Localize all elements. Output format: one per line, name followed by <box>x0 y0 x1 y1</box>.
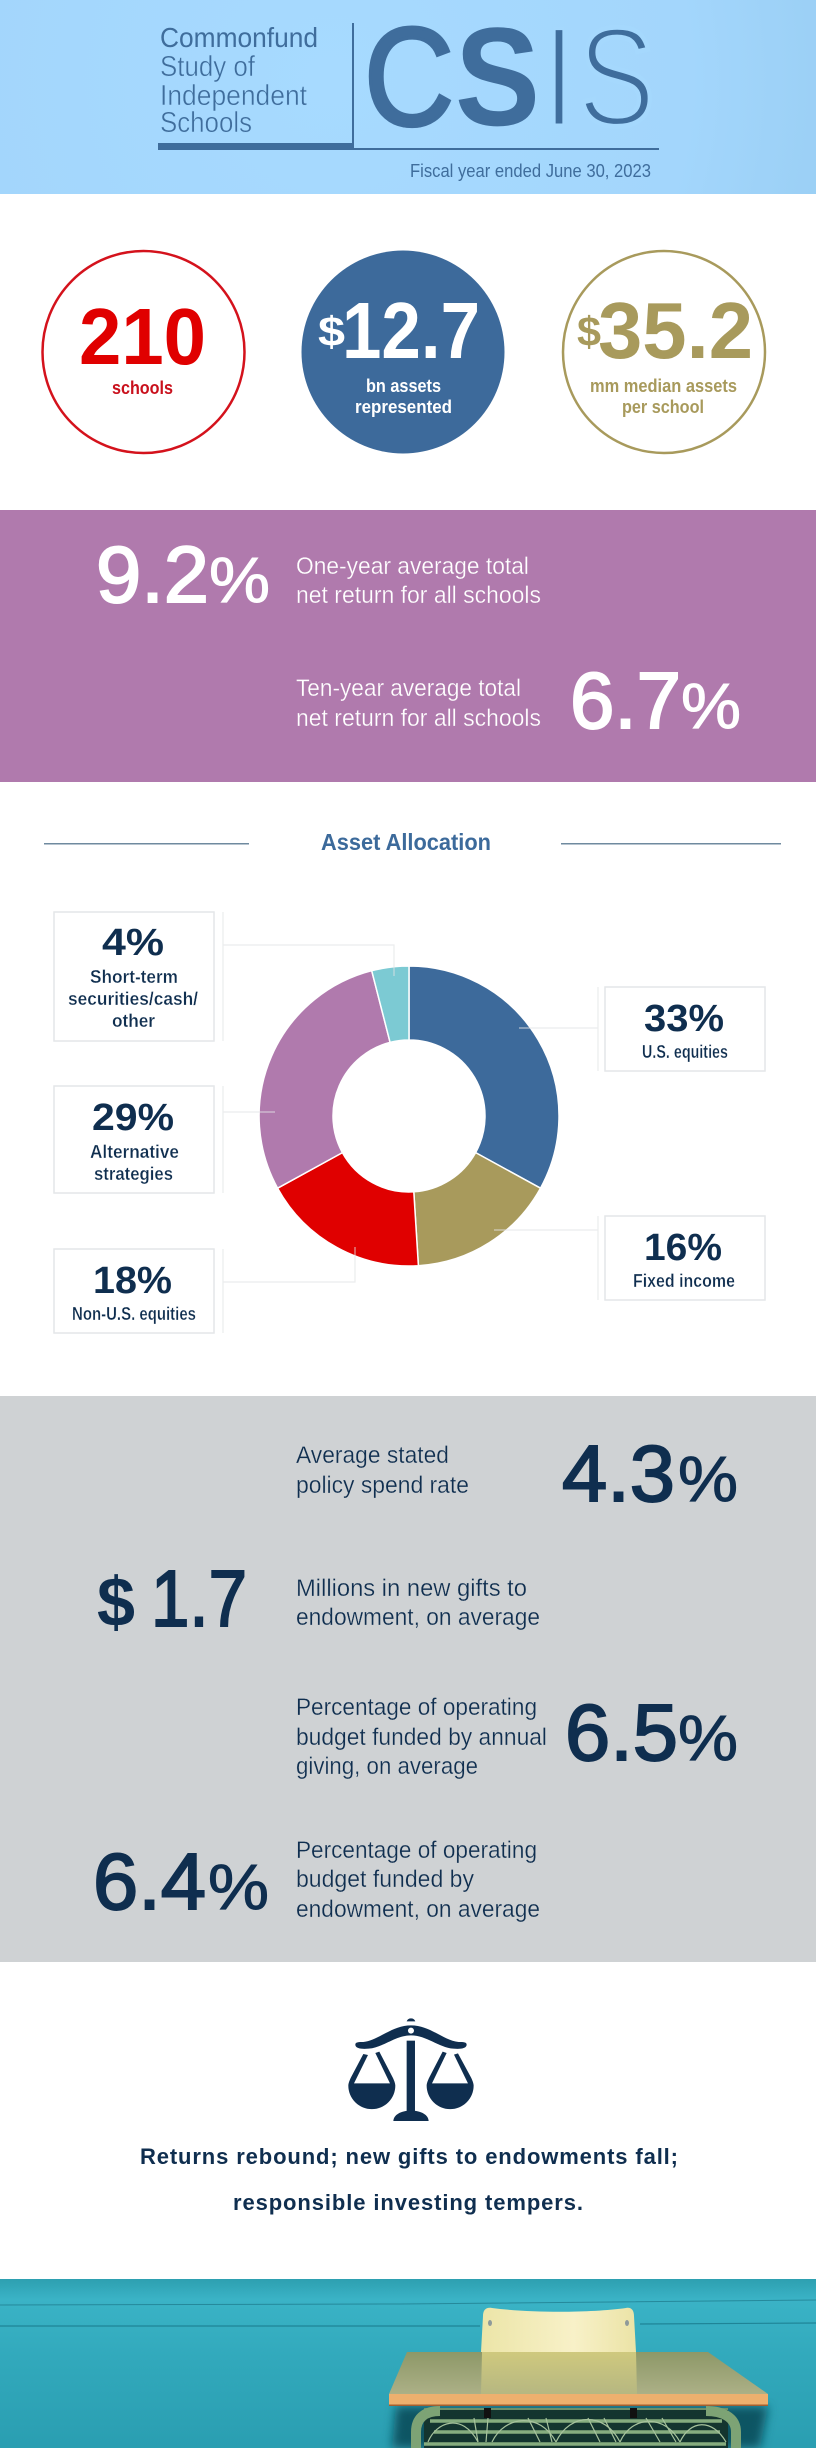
donut chart: asset allocation <box>259 966 559 1266</box>
stat circle: median assets: mm median assets <box>590 376 737 396</box>
stat circle: assets represented: 12.7 <box>342 286 480 375</box>
logo wordmark: C <box>364 0 454 155</box>
stat: new gifts <box>97 1554 540 1643</box>
stat: annual giving: % <box>678 1702 738 1774</box>
callout: alternative strategies: Alternative <box>90 1142 179 1162</box>
logo wordmark: I <box>546 0 572 155</box>
stat circle: schools: schools <box>112 378 173 398</box>
photo: school desk against teal wall <box>0 2279 816 2448</box>
stat: endowment funding: % <box>208 1851 269 1923</box>
one-year return: % <box>209 544 270 616</box>
desk shadow <box>392 2406 768 2448</box>
one-year return: One-year average total <box>296 553 529 580</box>
stat: policy spend rate: policy spend rate <box>296 1472 469 1499</box>
stat: annual giving: giving, on average <box>296 1753 478 1780</box>
stat circle: median assets <box>563 251 765 453</box>
callout: alternative strategies <box>54 1086 275 1193</box>
stat circle: assets represented: represented <box>355 397 452 417</box>
ten-year return: % <box>681 670 741 742</box>
one-year return <box>96 530 541 619</box>
stat: endowment funding: budget funded by <box>296 1866 474 1893</box>
callout: U.S. equities: U.S. equities <box>642 1042 728 1062</box>
panel: net returns <box>0 510 816 782</box>
fiscal year caption: Fiscal year ended June 30, 2023 <box>410 161 651 181</box>
stat: annual giving: budget funded by annual <box>296 1724 547 1751</box>
closing statement <box>140 2144 678 2215</box>
stat: policy spend rate: % <box>678 1443 738 1515</box>
stat: policy spend rate <box>296 1429 738 1518</box>
stat: new gifts: endowment, on average <box>296 1604 540 1631</box>
callout: U.S. equities <box>519 987 765 1071</box>
callout: short-term securities: other <box>112 1011 155 1031</box>
callout: short-term securities: securities/cash/ <box>68 989 198 1009</box>
closing statement: Returns rebound; new gifts to endowments fall; <box>140 2144 678 2169</box>
ten-year return: 6.7 <box>570 656 681 745</box>
icon: balance scales <box>348 2018 474 2121</box>
callout: short-term securities <box>54 912 394 1041</box>
stat circle: schools: 210 <box>79 292 206 381</box>
stat: annual giving <box>296 1688 738 1780</box>
one-year return: 9.2 <box>96 530 209 619</box>
ten-year return <box>296 656 741 745</box>
logo wordmark: Independent <box>160 80 307 112</box>
ten-year return: net return for all schools <box>296 705 541 732</box>
stat: policy spend rate: Average stated <box>296 1442 449 1469</box>
ten-year return: Ten-year average total <box>296 675 521 702</box>
desk top <box>389 2352 768 2394</box>
logo wordmark: Study of <box>160 51 256 83</box>
stat circle: assets represented <box>302 250 504 454</box>
logo wordmark: S <box>455 0 540 155</box>
logo wordmark: Schools <box>160 107 252 139</box>
stat: endowment funding <box>93 1837 540 1926</box>
callout: alternative strategies: strategies <box>94 1164 173 1184</box>
stat circle: median assets: $ <box>577 308 601 355</box>
logo wordmark: Commonfund <box>160 22 318 53</box>
logo wordmark <box>158 0 659 155</box>
callout: short-term securities: Short-term <box>90 967 178 987</box>
callout: non-U.S. equities: Non-U.S. equities <box>72 1304 196 1324</box>
stat: new gifts: Millions in new gifts to <box>296 1575 527 1602</box>
stat: new gifts: $ <box>97 1563 135 1641</box>
stat circle: assets represented: $ <box>318 308 345 355</box>
callout: non-U.S. equities: 18% <box>93 1260 172 1302</box>
header panel <box>0 0 816 194</box>
stat circle: schools <box>42 251 244 453</box>
stat: endowment funding: Percentage of operating <box>296 1837 537 1864</box>
callout: alternative strategies: 29% <box>92 1097 174 1139</box>
stat circle: median assets: 35.2 <box>598 286 753 375</box>
basket and frame <box>416 2408 736 2448</box>
stat: policy spend rate: 4.3 <box>562 1429 675 1518</box>
stat: endowment funding: 6.4 <box>93 1837 206 1926</box>
callout: fixed income <box>494 1216 765 1300</box>
stat circle: assets represented: bn assets <box>366 376 441 396</box>
callout: short-term securities: 4% <box>102 922 164 964</box>
chair back <box>481 2308 636 2352</box>
logo wordmark: S <box>578 0 655 155</box>
callout: fixed income: 16% <box>644 1227 722 1269</box>
stat: new gifts: 1.7 <box>151 1554 247 1643</box>
panel: spending and giving <box>0 1396 816 1962</box>
stat circle: median assets: per school <box>622 397 704 417</box>
heading: asset allocation: Asset Allocation <box>321 829 491 855</box>
callout: fixed income: Fixed income <box>633 1271 735 1291</box>
one-year return: net return for all schools <box>296 582 541 609</box>
stat: endowment funding: endowment, on average <box>296 1896 540 1923</box>
closing statement: responsible investing tempers. <box>233 2190 583 2215</box>
callout: non-U.S. equities <box>54 1247 355 1333</box>
stat: annual giving: 6.5 <box>565 1688 678 1777</box>
callout: U.S. equities: 33% <box>644 998 724 1040</box>
stat: annual giving: Percentage of operating <box>296 1694 537 1721</box>
